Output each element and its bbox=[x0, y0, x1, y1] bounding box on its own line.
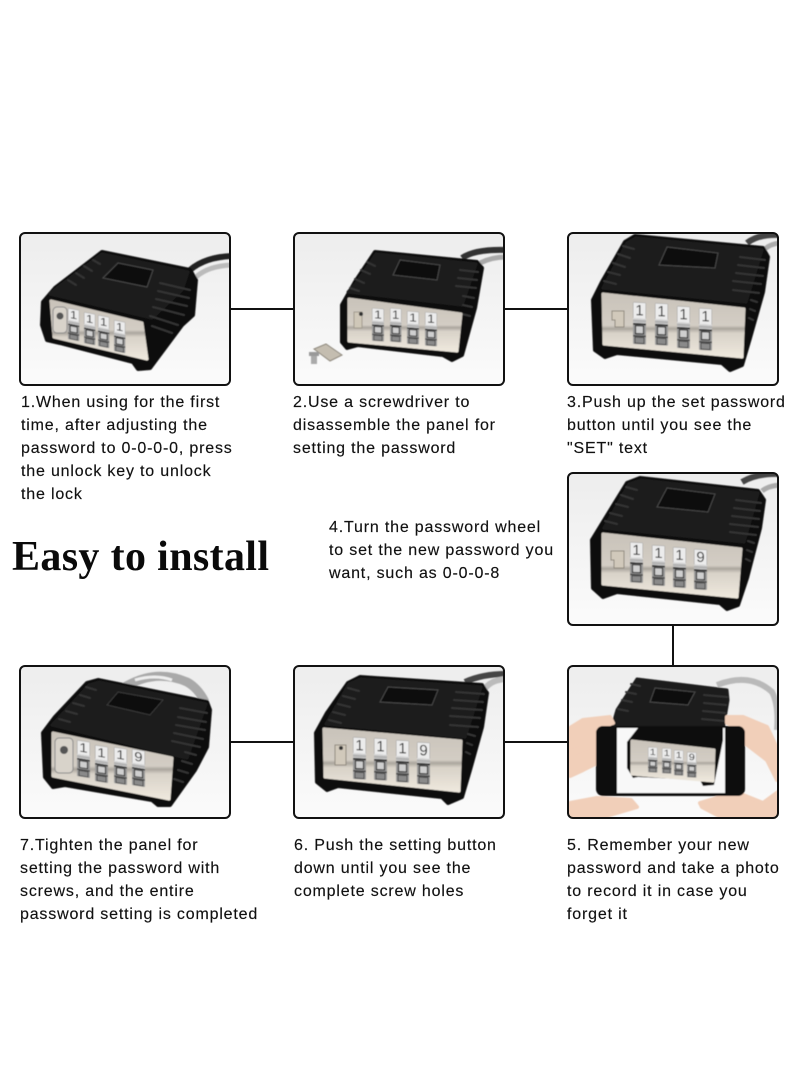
padlock: step 2 bbox=[342, 250, 506, 360]
padlock: step 1: 1 bbox=[100, 315, 107, 329]
panel: step 5 photo bbox=[568, 666, 778, 818]
padlock: step 1: 1 bbox=[86, 312, 93, 326]
phone bbox=[596, 726, 745, 796]
text: step 1: password to 0-0-0-0, press bbox=[21, 440, 233, 457]
padlock: step 6 bbox=[316, 674, 506, 803]
text: step 4: want, such as 0-0-0-8 bbox=[328, 565, 500, 582]
scene: lock behind phone held in hands: 9 bbox=[689, 753, 695, 763]
padlock: step 6: 1 bbox=[398, 740, 407, 758]
scene: lock behind phone held in hands bbox=[570, 679, 778, 818]
padlock: step 4 bbox=[592, 474, 780, 609]
text: step 5: 5. Remember your new bbox=[567, 837, 750, 854]
scene: lock behind phone held in hands: 1 bbox=[676, 751, 682, 761]
padlock: step 2: 1 bbox=[409, 310, 417, 325]
padlock: step 4: 1 bbox=[675, 548, 684, 564]
padlock: step 1 bbox=[42, 252, 232, 369]
padlock: step 7: 9 bbox=[134, 749, 143, 765]
panel: step 7 photo bbox=[20, 666, 230, 818]
panel: step 2 photo bbox=[294, 233, 506, 385]
padlock: step 4: 1 bbox=[632, 543, 641, 559]
padlock: step 1: 1 bbox=[116, 320, 123, 334]
padlock: step 1: 1 bbox=[70, 308, 77, 322]
scene: lock behind phone held in hands: 1 bbox=[664, 749, 670, 759]
screw and panel parts bbox=[309, 344, 342, 364]
padlock: step 2: 1 bbox=[427, 311, 435, 326]
text: step 4: to set the new password you bbox=[329, 542, 554, 559]
padlock: step 7: 1 bbox=[116, 747, 125, 763]
text: step 6: down until you see the bbox=[294, 860, 471, 877]
text: step 4: 4.Turn the password wheel bbox=[329, 519, 541, 536]
text: step 3: 3.Push up the set password bbox=[567, 394, 786, 411]
connector: step 1 to 2 bbox=[230, 308, 294, 310]
padlock: step 3 bbox=[593, 235, 780, 370]
padlock: step 3: 1 bbox=[635, 302, 644, 320]
connector: step 6 to 7 bbox=[230, 741, 294, 743]
padlock: behind phone bbox=[612, 679, 728, 730]
padlock: step 2: 1 bbox=[374, 307, 382, 322]
padlock: step 4: 9 bbox=[696, 550, 705, 566]
connector: step 2 to 3 bbox=[504, 308, 568, 310]
text: step 5: to record it in case you bbox=[567, 883, 748, 900]
padlock: step 4: 1 bbox=[654, 546, 663, 562]
padlock: step 7: 1 bbox=[79, 740, 88, 756]
shackle bbox=[717, 680, 777, 730]
padlock: step 6: 1 bbox=[355, 737, 364, 755]
title: Easy to install bbox=[12, 534, 269, 580]
padlock: step 6: 9 bbox=[419, 742, 428, 760]
panel: step 3 photo bbox=[568, 233, 780, 385]
padlock: step 7 bbox=[43, 676, 210, 805]
panel: step 1 photo bbox=[20, 233, 232, 385]
text: step 2: disassemble the panel for bbox=[293, 417, 496, 434]
text: step 3: "SET" text bbox=[567, 440, 648, 457]
padlock: step 3: 1 bbox=[701, 308, 710, 326]
small lock on phone screen bbox=[627, 728, 723, 786]
panel: step 6 photo bbox=[294, 666, 506, 818]
scene: lock behind phone held in hands: 1 bbox=[650, 748, 656, 758]
text: step 2: 2.Use a screwdriver to bbox=[293, 394, 470, 411]
text: step 1: the unlock key to unlock bbox=[21, 463, 212, 480]
text: step 7: 7.Tighten the panel for bbox=[20, 837, 198, 854]
text: step 7: screws, and the entire bbox=[20, 883, 195, 900]
panel: step 4 photo bbox=[568, 473, 780, 625]
text: step 6: complete screw holes bbox=[294, 883, 464, 900]
text: step 1: time, after adjusting the bbox=[21, 417, 208, 434]
padlock: step 3: 1 bbox=[657, 303, 666, 321]
padlock: step 3: 1 bbox=[679, 306, 688, 324]
text: step 1: 1.When using for the first bbox=[21, 394, 220, 411]
text: step 5: forget it bbox=[567, 906, 628, 923]
text: step 7: setting the password with bbox=[20, 860, 220, 877]
hands bbox=[570, 717, 637, 818]
text: step 2: setting the password bbox=[293, 440, 456, 457]
text: step 6: 6. Push the setting button bbox=[294, 837, 497, 854]
text: step 5: password and take a photo bbox=[567, 860, 780, 877]
text: step 7: password setting is completed bbox=[20, 906, 258, 923]
text: step 1: the lock bbox=[21, 486, 83, 503]
text: step 3: button until you see the bbox=[567, 417, 752, 434]
padlock: step 7: 1 bbox=[97, 745, 106, 761]
padlock: step 6: 1 bbox=[376, 738, 385, 756]
connector: step 5 to 6 bbox=[504, 741, 568, 743]
connector: step 4 to 5 bbox=[672, 625, 674, 666]
padlock: step 2: 1 bbox=[392, 308, 399, 322]
